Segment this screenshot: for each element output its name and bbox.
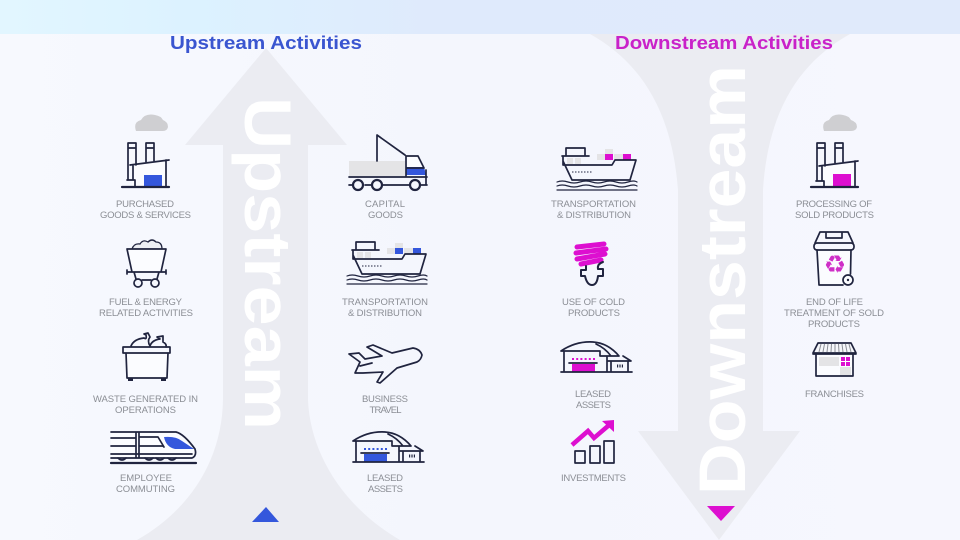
label: PURCHASED [116,199,174,210]
icon: recycle symbol: ♻ [824,250,846,279]
label [562,297,625,319]
panel: end of life treatment [784,232,884,330]
upstream arrow background [137,48,400,540]
magenta down marker [707,506,735,521]
label: & DISTRIBUTION [557,210,631,221]
icon: hangar [353,432,424,462]
label: TREATMENT OF SOLD [784,308,884,319]
label: USE OF COLD [562,297,625,308]
label: FRANCHISES [805,389,864,400]
label [367,473,403,495]
label [93,394,198,416]
label: GOODS & SERVICES [100,210,191,221]
icon: factory [811,143,858,187]
label: PRODUCTS [568,308,620,319]
label: GOODS [368,210,403,221]
panel: fuel and energy [99,240,193,319]
panel: use of sold products [562,244,625,319]
label [575,389,611,411]
label: LEASED [367,473,403,484]
icon: airplane [349,345,422,383]
label [551,199,636,221]
icon: hangar [561,342,632,372]
label [795,199,874,221]
icon: cloud [823,115,857,131]
top band [0,0,960,34]
panel: employee commuting [111,432,196,495]
panel: transportation and distribution upstream [342,242,428,319]
panel: leased assets upstream [353,432,424,495]
panel: waste generated [93,333,198,416]
downstream arrow background [590,34,850,540]
label: CAPITAL [365,199,405,210]
icon: growth chart [572,420,614,463]
label [116,473,175,495]
icon: cargo ship [557,148,637,190]
label: PRODUCTS [808,319,860,330]
label: TRANSPORTATION [342,297,428,308]
label [342,297,428,319]
label [365,199,405,221]
label: LEASED [575,389,611,400]
label: ASSETS [368,484,403,495]
panel: investments [561,420,626,484]
icon: store [813,343,856,376]
panel: capital goods [349,135,427,221]
panel: franchises [805,343,864,400]
label: EMPLOYEE [120,473,172,484]
label: WASTE GENERATED IN [93,394,198,405]
icon: cargo ship [347,242,427,284]
blue up marker [252,507,279,522]
label: FUEL & ENERGY [109,297,183,308]
title: downstream activities: Downstream Activities [615,33,833,53]
panel: purchased goods and services [100,115,191,221]
label: TRAVEL [370,405,402,416]
icon: waste container [123,333,170,381]
icon: spiral bulb [576,244,606,285]
label: & DISTRIBUTION [348,308,422,319]
icon: factory [122,143,169,187]
label: SOLD PRODUCTS [795,210,874,221]
icon: train [111,432,196,463]
label: BUSINESS [362,394,408,405]
downstream vertical text: Downstream [685,65,759,495]
panel: processing of sold products [795,115,874,221]
panel: leased assets downstream [561,342,632,411]
label: PROCESSING OF [796,199,872,210]
label [100,199,191,221]
icon: cloud [135,115,168,131]
label: COMMUTING [116,484,175,495]
label [362,394,408,416]
icon: coal cart [127,240,166,287]
label [784,297,884,330]
label: INVESTMENTS [561,473,626,484]
upstream vertical text: Upstream [231,97,305,430]
label: ASSETS [576,400,611,411]
label: OPERATIONS [115,405,176,416]
label: TRANSPORTATION [551,199,636,210]
title: upstream activities: Upstream Activities [170,33,362,53]
label: RELATED ACTIVITIES [99,308,193,319]
panel: business travel [349,345,422,416]
panel: transportation and distribution downstream [551,148,637,221]
label [99,297,193,319]
label: END OF LIFE [806,297,863,308]
icon: truck [349,135,427,190]
